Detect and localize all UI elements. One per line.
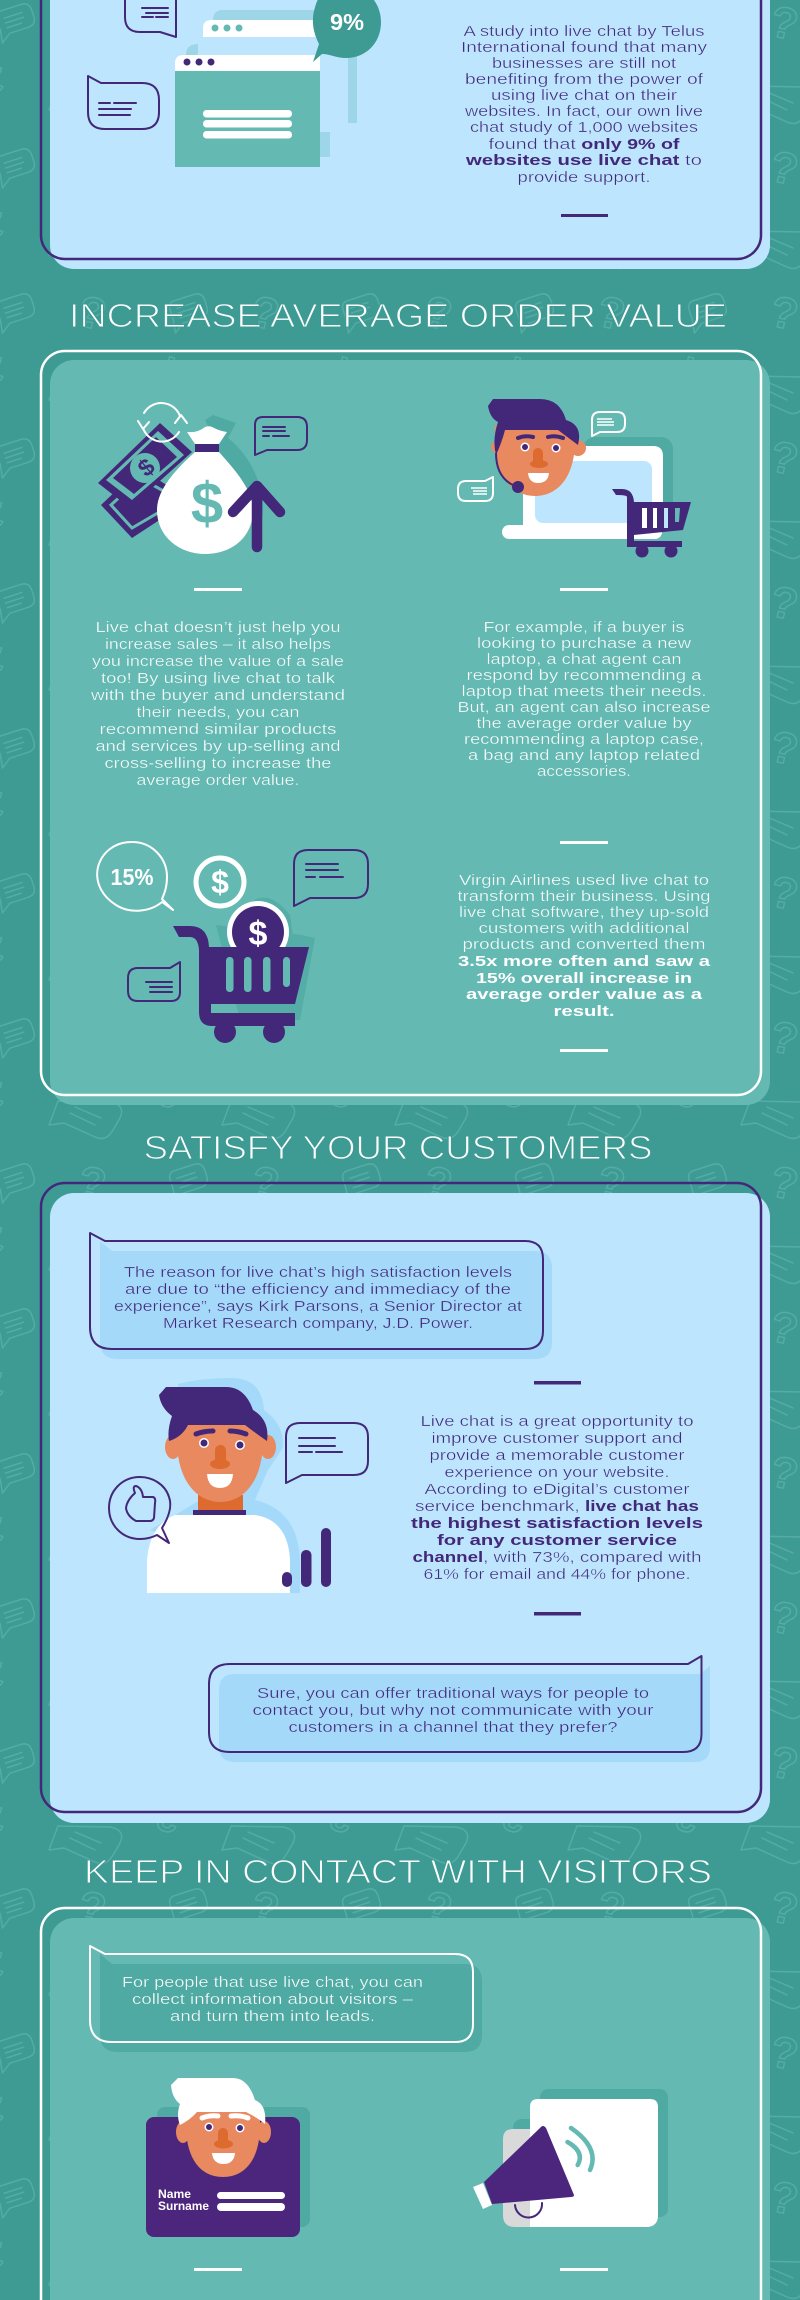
icon: shopping cart with coins and 15% bubble: $ bbox=[249, 915, 268, 953]
panel: increase average order value bbox=[41, 351, 770, 1105]
callout: collect visitor information: For people that use live chat, you can bbox=[122, 1974, 423, 1991]
text: Telus study: websites. In fact, our own live bbox=[464, 103, 703, 120]
text: eDigital benchmark: for any customer service bbox=[437, 1532, 677, 1549]
text: Virgin Airlines example: 3.5x more often and saw a bbox=[458, 953, 711, 970]
text: Telus study: provide support. bbox=[518, 169, 650, 186]
text: laptop example: a bag and any laptop related bbox=[468, 747, 700, 764]
text: live chat increases sale value: their needs, you can bbox=[136, 704, 300, 721]
callout: Kirk Parsons quote: are due to “the efficiency and immediacy of the bbox=[125, 1281, 511, 1298]
text: laptop example: laptop, a chat agent can bbox=[486, 651, 682, 668]
text: laptop example: looking to purchase a new bbox=[477, 635, 691, 652]
text: Telus study: International found that many bbox=[461, 39, 708, 56]
callout: collect visitor information: collect information about visitors – bbox=[132, 1991, 414, 2008]
text: eDigital benchmark: service benchmark, live chat has bbox=[415, 1498, 699, 1515]
icon: shopping cart with coins and 15% bubble bbox=[97, 842, 368, 1043]
text: laptop example: recommending a laptop case, bbox=[464, 731, 704, 748]
panel: live chat usage study bbox=[41, 0, 770, 269]
callout: traditional ways: customers in a channel that they prefer? bbox=[288, 1719, 618, 1736]
text: live chat increases sale value: increase sales – it also helps bbox=[105, 636, 331, 653]
panel: satisfy your customers bbox=[41, 1183, 770, 1823]
icon: chat bubble top bbox=[125, 0, 176, 37]
icon: megaphone on paper bbox=[473, 2089, 668, 2227]
text: Telus study: using live chat on their bbox=[491, 87, 677, 104]
text: eDigital benchmark bbox=[411, 1413, 703, 1583]
text: laptop example: laptop that meets their needs. bbox=[462, 683, 706, 700]
text: Telus study: found that only 9% of bbox=[488, 136, 681, 153]
text: Telus study: benefiting from the power of bbox=[465, 71, 704, 88]
callout: traditional ways: Sure, you can offer traditional ways for people to bbox=[257, 1685, 649, 1702]
text: laptop example: the average order value by bbox=[476, 715, 692, 732]
callout: Kirk Parsons quote bbox=[90, 1233, 552, 1359]
text: Telus study bbox=[461, 23, 708, 186]
text: live chat increases sale value: recommend similar products bbox=[100, 721, 336, 738]
callout: Kirk Parsons quote: Market Research company, J.D. Power. bbox=[163, 1315, 473, 1332]
callout: Kirk Parsons quote: experience”, says Kirk Parsons, a Senior Director at bbox=[114, 1298, 523, 1315]
text: Virgin Airlines example bbox=[458, 872, 711, 1020]
heading: increase average order value: INCREASE AVERAGE ORDER VALUE bbox=[69, 297, 727, 334]
text: live chat increases sale value bbox=[90, 619, 345, 789]
text: live chat increases sale value: Live chat doesn’t just help you bbox=[96, 619, 340, 636]
text: Virgin Airlines example: Virgin Airlines used live chat to bbox=[459, 872, 709, 889]
callout: collect visitor information bbox=[90, 1946, 482, 2052]
text: live chat increases sale value: cross-selling to increase the bbox=[104, 755, 332, 772]
icon: ID card with white-haired man bbox=[146, 2078, 310, 2237]
text: Virgin Airlines example: 15% overall increase in bbox=[476, 970, 692, 987]
text: laptop example: accessories. bbox=[537, 763, 631, 780]
text: eDigital benchmark: 61% for email and 44% for phone. bbox=[424, 1566, 690, 1583]
icon: smiling man with thumbs up and bars bbox=[109, 1378, 368, 1593]
icon: money bag with arrow bbox=[98, 403, 307, 554]
text: eDigital benchmark: channel , with 73%, compared with bbox=[412, 1549, 702, 1566]
text: eDigital benchmark: the highest satisfaction levels bbox=[411, 1515, 703, 1532]
text: live chat increases sale value: with the buyer and understand bbox=[90, 687, 345, 704]
callout: traditional ways bbox=[209, 1656, 710, 1762]
text: Virgin Airlines example: customers with additional bbox=[478, 920, 690, 937]
icon: ID card with white-haired man: Surname bbox=[158, 2201, 209, 2213]
text: live chat increases sale value: and services by up-selling and bbox=[96, 738, 340, 755]
heading: satisfy your customers: SATISFY YOUR CUSTOMERS bbox=[144, 1129, 652, 1166]
panel: keep in contact with visitors bbox=[41, 1908, 770, 2300]
text: laptop example: For example, if a buyer is bbox=[484, 619, 684, 636]
text: laptop example: respond by recommending a bbox=[466, 667, 702, 684]
text: Virgin Airlines example: result. bbox=[554, 1003, 614, 1020]
icon: shopping cart with coins and 15% bubble: $ bbox=[211, 864, 229, 900]
icon: chat bubble left bbox=[88, 76, 159, 129]
text: Telus study: A study into live chat by Telus bbox=[464, 23, 704, 40]
icon: money bag with arrow: $ bbox=[191, 471, 223, 536]
text: eDigital benchmark: improve customer support and bbox=[432, 1430, 682, 1447]
icon: browser windows with 9% bubble: 9% bbox=[330, 9, 364, 35]
text: Telus study: websites use live chat to bbox=[465, 152, 702, 169]
text: laptop example: But, an agent can also increase bbox=[458, 699, 710, 716]
icon: browser windows with 9% bubble bbox=[175, 0, 381, 167]
text: eDigital benchmark: According to eDigital’s customer bbox=[424, 1481, 690, 1498]
text: eDigital benchmark: Live chat is a great opportunity to bbox=[420, 1413, 694, 1430]
text: live chat increases sale value: average order value. bbox=[136, 772, 300, 789]
callout: traditional ways: contact you, but why not communicate with your bbox=[252, 1702, 654, 1719]
text: live chat increases sale value: too! By using live chat to talk bbox=[101, 670, 336, 687]
text: Telus study: businesses are still not bbox=[492, 55, 677, 72]
text: eDigital benchmark: experience on your website. bbox=[444, 1464, 670, 1481]
text: Virgin Airlines example: live chat software, they up-sold bbox=[459, 904, 709, 921]
callout: collect visitor information: and turn them into leads. bbox=[170, 2008, 375, 2025]
callout: Kirk Parsons quote: The reason for live chat’s high satisfaction levels bbox=[124, 1264, 512, 1281]
text: eDigital benchmark: provide a memorable customer bbox=[430, 1447, 684, 1464]
text: laptop example bbox=[458, 619, 710, 780]
icon: agent on laptop with cart bbox=[458, 399, 691, 558]
text: Virgin Airlines example: transform their business. Using bbox=[458, 888, 710, 905]
icon: money bag with arrow: $ bbox=[133, 453, 161, 483]
text: live chat increases sale value: you increase the value of a sale bbox=[92, 653, 344, 670]
text: Telus study: chat study of 1,000 websites bbox=[470, 119, 698, 136]
text: Virgin Airlines example: products and converted them bbox=[462, 936, 706, 953]
icon: shopping cart with coins and 15% bubble: 15% bbox=[110, 864, 154, 890]
heading: keep in contact with visitors: KEEP IN CONTACT WITH VISITORS bbox=[84, 1853, 712, 1890]
text: Virgin Airlines example: average order value as a bbox=[466, 986, 703, 1003]
icon: ID card with white-haired man: Name bbox=[158, 2189, 191, 2201]
